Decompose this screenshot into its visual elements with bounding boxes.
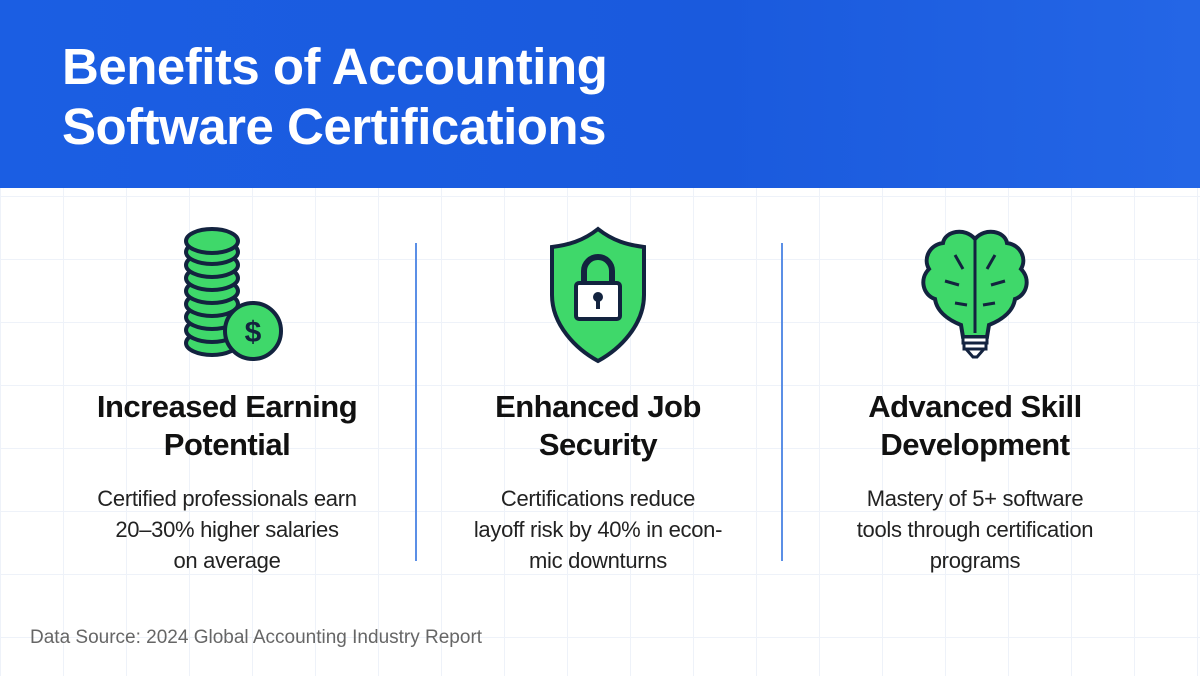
icon: coins: $ xyxy=(245,316,262,349)
body text xyxy=(97,486,357,573)
header banner xyxy=(0,0,1200,188)
body text: on average xyxy=(173,548,281,573)
body text: Certifications reduce xyxy=(501,486,695,511)
heading xyxy=(868,389,1082,462)
panel: skill xyxy=(857,230,1093,573)
divider xyxy=(781,243,783,561)
heading xyxy=(97,389,357,462)
icon: brain bulb xyxy=(921,230,1029,358)
heading: Security xyxy=(539,427,657,462)
title: Software Certifications xyxy=(62,98,606,155)
heading: Potential xyxy=(164,427,290,462)
heading: Increased Earning xyxy=(97,389,357,424)
heading: Enhanced Job xyxy=(495,389,701,424)
heading: Advanced Skill xyxy=(868,389,1082,424)
body text: 20–30% higher salaries xyxy=(115,517,339,542)
body text xyxy=(857,486,1093,573)
heading: Development xyxy=(880,427,1070,462)
icon: coins xyxy=(184,227,283,361)
body text: Mastery of 5+ software xyxy=(867,486,1083,511)
body text: programs xyxy=(930,548,1020,573)
footer source: Data Source: 2024 Global Accounting Industry Report xyxy=(30,627,482,648)
body text: layoff risk by 40% in econ- xyxy=(474,517,722,542)
body text: Certified professionals earn xyxy=(97,486,357,511)
divider xyxy=(415,243,417,561)
body text: mic downturns xyxy=(529,548,667,573)
heading xyxy=(495,389,701,462)
panel: security xyxy=(474,226,722,573)
icon: shield lock xyxy=(550,226,646,364)
panel: earning xyxy=(97,227,357,573)
body text: tools through certification xyxy=(857,517,1093,542)
title xyxy=(62,38,607,155)
title: Benefits of Accounting xyxy=(62,38,607,95)
body text xyxy=(474,486,722,573)
